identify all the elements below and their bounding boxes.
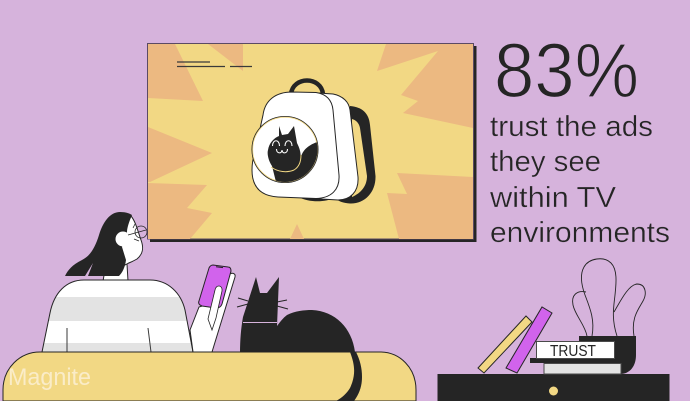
cat on sofa (237, 277, 355, 353)
plant (573, 259, 645, 336)
drawer knob (549, 386, 558, 396)
text block: trust statement: trust the ads (490, 111, 653, 143)
text block: trust statement: within TV (489, 182, 617, 214)
thumb (208, 286, 222, 330)
stat: 83%: 83% (494, 28, 639, 114)
book stack (530, 342, 621, 374)
striped sweater (40, 280, 195, 352)
text block: trust statement: environments (490, 217, 670, 249)
plant pot (579, 336, 636, 374)
book: yellow leaning (478, 316, 532, 373)
book label: TRUST (550, 343, 596, 360)
hair (65, 212, 132, 276)
glasses (128, 224, 147, 241)
headline bars on screen (177, 62, 252, 66)
phone (199, 265, 231, 308)
ear (116, 232, 130, 246)
book: purple leaning (506, 307, 552, 373)
text block: trust statement (489, 111, 670, 249)
icon: cat backpack (252, 80, 376, 204)
porthole with cat (252, 116, 318, 183)
text block: trust statement: they see (490, 146, 601, 178)
panel: TV screen (148, 44, 476, 242)
sofa (3, 352, 416, 401)
hand holding phone (190, 273, 235, 352)
shelf (438, 374, 670, 401)
logo: Magnite: Magnite (8, 364, 91, 391)
cat tail (336, 352, 362, 401)
neck (103, 262, 128, 281)
face (118, 216, 143, 265)
figure: woman watching TV (40, 212, 235, 352)
burst shapes behind backpack (148, 44, 473, 239)
